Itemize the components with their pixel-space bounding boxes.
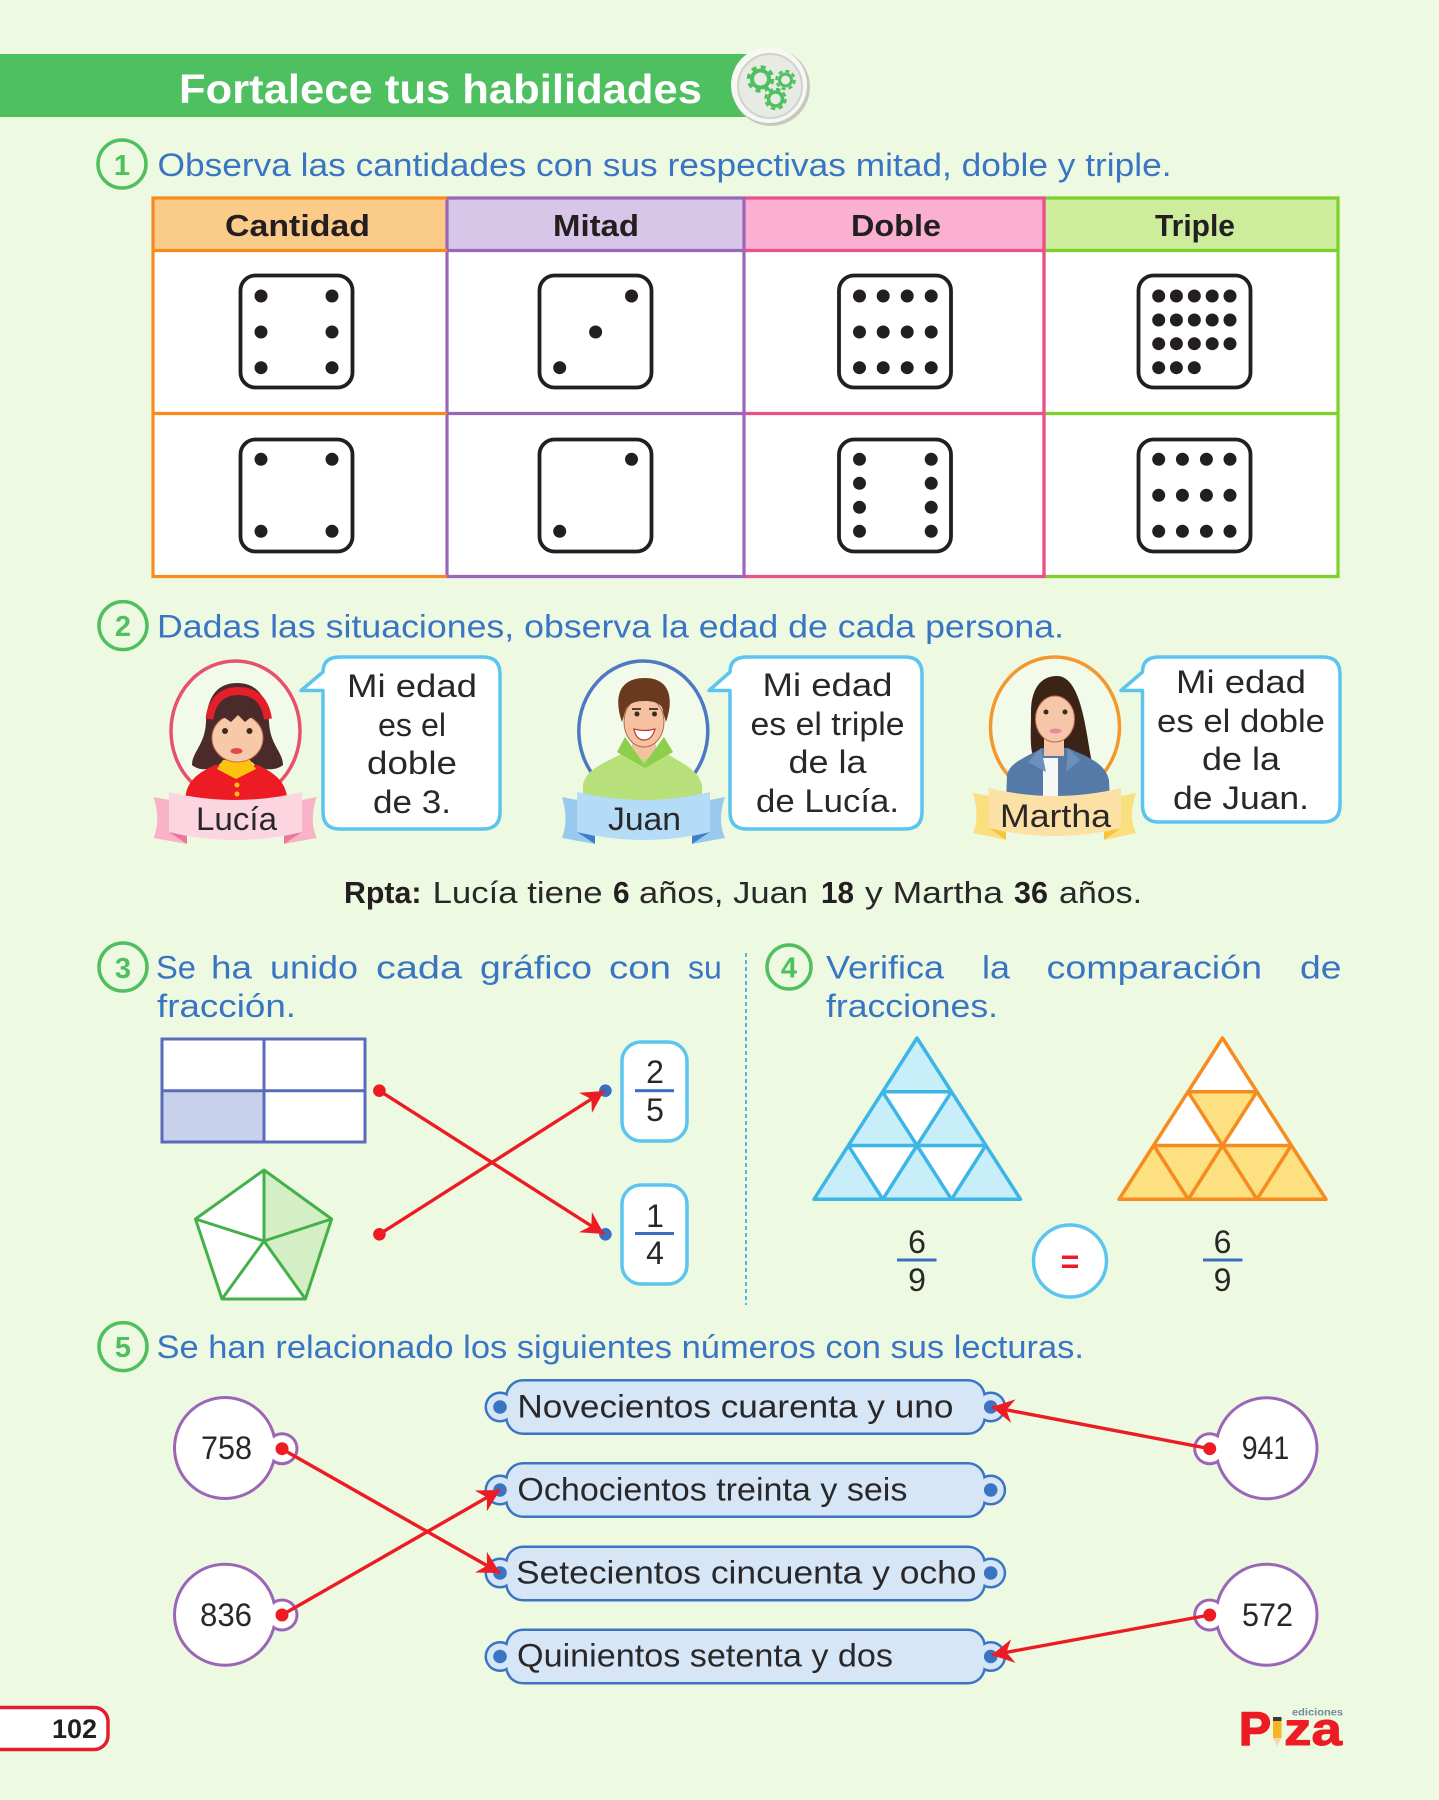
heading: exercise 3: gráfico <box>480 950 592 986</box>
comparison sign: equals <box>1034 1225 1106 1297</box>
speech bubble: Lucía: doble <box>367 745 457 781</box>
fraction box: 2/5: 5 <box>646 1092 664 1128</box>
heading: exercise 3: cada <box>376 950 462 986</box>
character: Lucía <box>154 661 317 844</box>
ribbon: Lucía <box>154 792 317 844</box>
answer: Rpta: Lucía tiene <box>433 875 603 910</box>
speech bubble: Lucía: es el <box>378 707 446 743</box>
title: Fortalece tus habilidades <box>179 66 702 112</box>
heading: exercise 5: Se han relacionado los siguientes números con sus lecturas. <box>156 1329 1084 1365</box>
heading: exercise 2 <box>99 602 1064 650</box>
number bubble: 836: 836 <box>200 1597 252 1633</box>
fraction box: 1/4 <box>622 1185 687 1284</box>
arrows: number to reading <box>282 1407 1210 1655</box>
label pill: Ochocientos treinta y seis: Ochocientos treinta y seis <box>517 1472 907 1508</box>
die: 18 <box>1138 276 1250 388</box>
chart: rectangle one quarter shaded <box>162 1039 365 1142</box>
fraction: 6/9 right <box>1203 1224 1242 1298</box>
label pill: Ochocientos treinta y seis <box>484 1462 1006 1518</box>
table headers: Triple <box>1155 208 1235 243</box>
label pill: Novecientos cuarenta y uno <box>484 1379 1006 1435</box>
ribbon: Lucía: Lucía <box>196 801 277 837</box>
number bubble: 572: 572 <box>1242 1597 1293 1633</box>
die: 4 <box>240 440 352 552</box>
logo: Piza ediciones <box>1239 1702 1343 1755</box>
table headers: Mitad <box>553 208 639 243</box>
fraction: 6/9 left: 9 <box>908 1262 926 1298</box>
logo: Piza ediciones: P <box>1239 1702 1271 1755</box>
speech bubble: Juan: de Lucía. <box>756 783 899 819</box>
heading: exercise 3: 3 <box>115 953 131 985</box>
table headers: Cantidad <box>225 208 370 243</box>
speech bubble: Martha: de la <box>1202 741 1280 777</box>
heading: exercise 4: fracciones. <box>826 988 998 1024</box>
answer: Rpta: 18 <box>821 875 854 910</box>
heading: exercise 4: 4 <box>781 952 797 984</box>
speech bubble: Lucía: de 3. <box>373 784 451 820</box>
number bubble: 836 <box>173 1563 298 1667</box>
ribbon: Juan: Juan <box>608 801 681 837</box>
answer: Rpta <box>344 875 1142 910</box>
speech bubble: Juan: Mi edad <box>762 667 892 703</box>
speech bubble: Martha <box>1121 657 1340 822</box>
table headers <box>225 208 1235 243</box>
icon: pencil <box>1273 1717 1282 1746</box>
number bubble: 941: 941 <box>1242 1430 1289 1466</box>
die: 2 <box>540 440 652 552</box>
answer: Rpta: años, Juan <box>639 875 808 910</box>
character: Martha <box>973 657 1136 840</box>
logo: Piza ediciones: za <box>1284 1703 1342 1755</box>
die: 3 <box>540 276 652 388</box>
heading: exercise 3: ha <box>211 950 252 986</box>
die: 6 <box>240 276 352 388</box>
fraction box: 2/5: 2 <box>646 1054 664 1090</box>
label pill: Quinientos setenta y dos <box>484 1628 1006 1684</box>
label pill: Quinientos setenta y dos: Quinientos setenta y dos <box>517 1638 893 1674</box>
number bubble: 941 <box>1193 1396 1318 1500</box>
chart: pentagon two fifths shaded <box>196 1170 332 1299</box>
answer: Rpta: años. <box>1059 875 1142 910</box>
comparison sign: equals: = <box>1061 1244 1079 1280</box>
heading: exercise 4: de <box>1300 950 1342 986</box>
heading: exercise 2: Dadas las situaciones, observa la edad de cada persona. <box>157 608 1064 644</box>
heading: exercise 3: Se <box>156 950 196 986</box>
speech bubble: Lucía: Mi edad <box>347 668 477 704</box>
die: 12 <box>839 276 951 388</box>
label pill: Novecientos cuarenta y uno: Novecientos cuarenta y uno <box>517 1388 953 1424</box>
page number <box>0 1708 108 1750</box>
banner: Fortalece tus habilidades <box>0 47 810 126</box>
heading: exercise 3: su <box>688 950 722 986</box>
heading: exercise 1: 1 <box>114 150 130 182</box>
speech bubble: Martha: de Juan. <box>1173 780 1309 816</box>
fraction: 6/9 left <box>897 1224 936 1298</box>
speech bubble: Martha: Mi edad <box>1176 664 1306 700</box>
die: 8 <box>839 440 951 552</box>
page number: 102 <box>52 1714 97 1744</box>
speech bubble: Martha: es el doble <box>1157 703 1325 739</box>
speech bubble: Juan <box>709 657 922 829</box>
heading: exercise 3: con <box>609 950 671 986</box>
fraction: 6/9 right: 6 <box>1214 1224 1231 1260</box>
table: cantidad, mitad, doble, triple <box>153 198 1338 576</box>
heading: exercise 4: Verifica <box>826 950 944 986</box>
fraction box: 1/4: 4 <box>646 1235 664 1271</box>
heading: exercise 4 <box>767 945 1342 1024</box>
answer: Rpta: 6 <box>613 875 630 910</box>
heading: exercise 2: 2 <box>115 611 131 643</box>
icon: gears badge <box>731 47 810 126</box>
label pill: Setecientos cincuenta y ocho <box>484 1546 1006 1602</box>
die: 12 grid <box>1138 440 1250 552</box>
heading: exercise 1 <box>98 140 1172 188</box>
fraction box: 1/4: 1 <box>646 1198 664 1234</box>
heading: exercise 5: 5 <box>115 1332 131 1364</box>
fraction: 6/9 right: 9 <box>1214 1262 1231 1298</box>
heading: exercise 3: fracción. <box>157 988 296 1024</box>
answer: Rpta: 36 <box>1014 875 1048 910</box>
number bubble: 758 <box>173 1396 298 1500</box>
answer: Rpta: Rpta: <box>344 875 422 910</box>
arrows: graphic to fraction <box>373 1084 612 1241</box>
ribbon: Martha: Martha <box>1000 798 1111 834</box>
speech bubble: Juan: de la <box>788 744 867 780</box>
character: Juan <box>562 661 725 844</box>
label pill: Setecientos cincuenta y ocho: Setecientos cincuenta y ocho <box>516 1554 976 1590</box>
ribbon: Martha <box>973 788 1136 840</box>
logo: Piza ediciones: ediciones <box>1292 1708 1343 1718</box>
heading: exercise 3: unido <box>270 950 358 986</box>
speech bubble: Lucía <box>301 657 500 829</box>
divider line <box>745 953 747 1305</box>
fraction: 6/9 left: 6 <box>908 1224 926 1260</box>
speech bubble: Juan: es el triple <box>750 706 904 742</box>
chart: orange triangle 6/9 <box>1119 1038 1326 1199</box>
answer: Rpta: y Martha <box>865 875 1004 910</box>
ribbon: Juan <box>562 792 725 844</box>
heading: exercise 1: Observa las cantidades con sus respectivas mitad, doble y triple. <box>158 147 1172 183</box>
heading: exercise 4: la <box>982 950 1010 986</box>
fraction box: 2/5 <box>622 1042 687 1141</box>
number bubble: 572 <box>1193 1563 1318 1667</box>
chart: blue triangle 6/9 <box>814 1038 1020 1199</box>
heading: exercise 4: comparación <box>1046 950 1262 986</box>
table headers: Doble <box>851 208 941 243</box>
number bubble: 758: 758 <box>201 1430 252 1466</box>
heading: exercise 3 <box>99 943 722 1024</box>
heading: exercise 5 <box>99 1323 1084 1371</box>
